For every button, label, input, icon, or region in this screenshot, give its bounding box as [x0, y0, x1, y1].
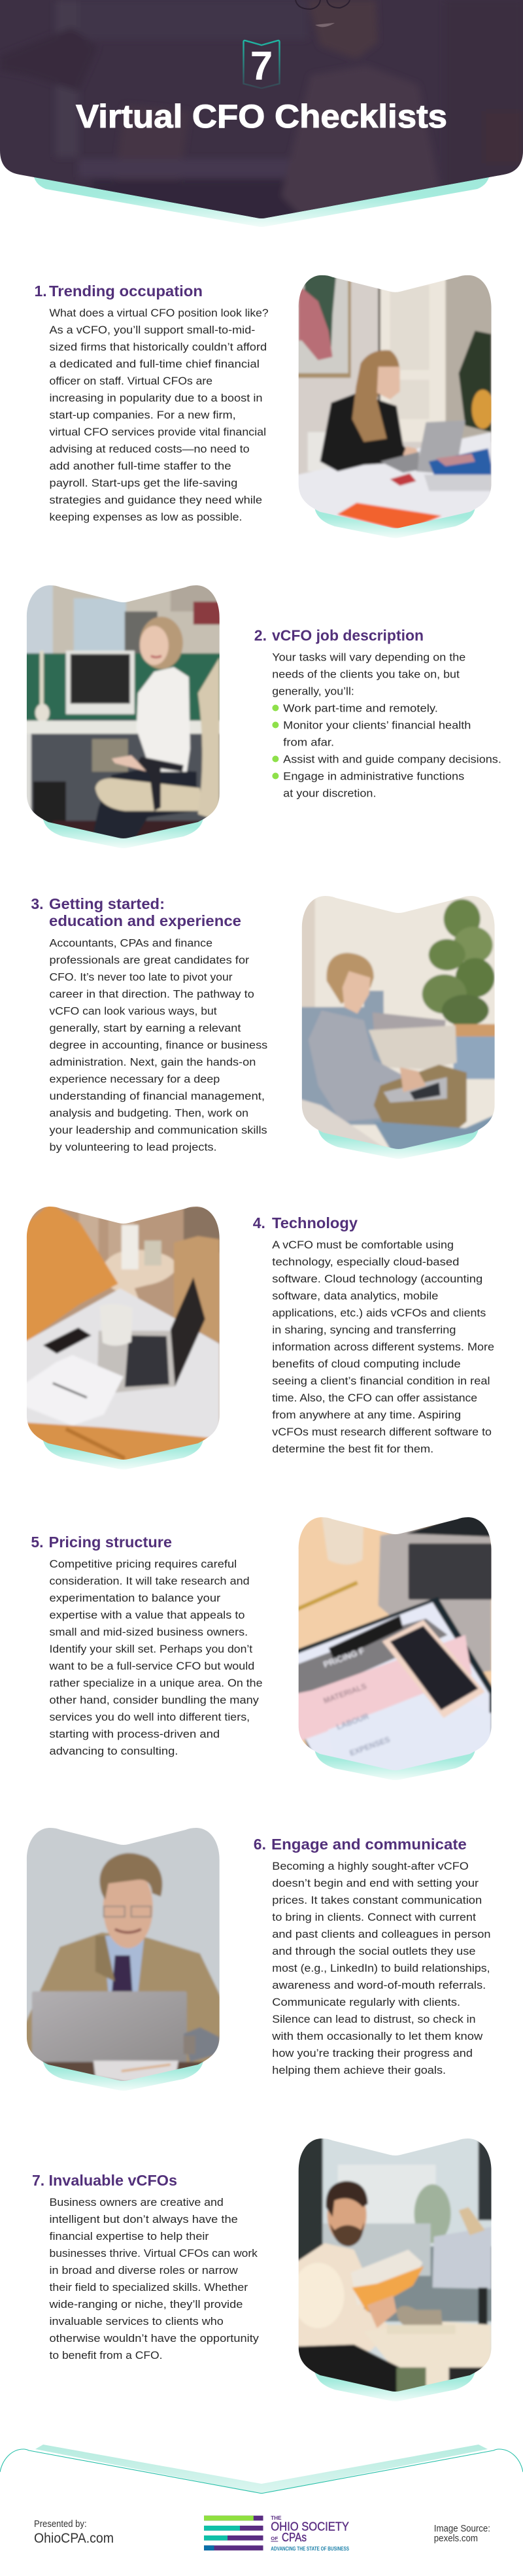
text block: needs of the clients you take on, but: [272, 668, 460, 680]
text block: rather specialize in a unique area. On the: [50, 1677, 263, 1689]
text block: intelligent but don’t always have the: [50, 2213, 238, 2225]
text block: seeing a client’s financial condition in real: [272, 1375, 490, 1387]
footer: image source: pexels.com: [434, 2533, 478, 2544]
text block: expertise with a value that appeals to: [50, 1609, 245, 1621]
text block: experimentation to balance your: [50, 1592, 221, 1604]
text block: software, data analytics, mobile: [272, 1290, 438, 1302]
text block: businesses thrive. Virtual CFOs can work: [50, 2247, 258, 2259]
text block: Becoming a highly sought-after vCFO: [272, 1860, 469, 1872]
text block: Your tasks will vary depending on the: [272, 651, 465, 663]
text block: virtual CFO services provide vital financial: [50, 426, 266, 438]
text block: a dedicated and full-time chief financial: [50, 358, 260, 370]
text block: otherwise wouldn’t have the opportunity: [50, 2332, 259, 2344]
photo: clipboard, phone and laptop: EXPENSES: [348, 1735, 391, 1758]
logo: the Ohio Society of CPAs: CPAs: [282, 2531, 307, 2544]
text block: start-up companies. For a new firm,: [50, 409, 236, 421]
text block: and through the social outlets they use: [272, 1945, 476, 1957]
title: Virtual CFO Checklists: [76, 98, 447, 135]
text block: Business owners are creative and: [50, 2196, 224, 2208]
text block: small and mid-sized business owners.: [50, 1626, 248, 1638]
text block: [50, 936, 267, 1154]
text block: add another full-time staffer to the: [50, 460, 231, 472]
photo: man holding book at desk: [292, 2135, 499, 2401]
footer: presented by: Presented by:: [34, 2518, 87, 2530]
text block: vCFO can look various ways, but: [50, 1005, 217, 1018]
text block: What does a virtual CFO position look like?: [50, 307, 269, 319]
heading: 4.: [253, 1214, 265, 1231]
heading: 6.: [254, 1836, 266, 1853]
text block: Identify your skill set. Perhaps you don’t: [50, 1643, 252, 1655]
text block: advising at reduced costs—no need to: [50, 443, 250, 455]
text block: [271, 1860, 490, 2076]
panel: 4 technology: [24, 1203, 494, 1469]
text block: increasing in popularity due to a boost in: [50, 392, 263, 404]
photo: clipboard, phone and laptop: MATERIALS: [322, 1681, 368, 1706]
text block: professionals are great candidates for: [50, 953, 249, 967]
text block: other hand, consider bundling the many: [50, 1694, 259, 1706]
bullet list: Work part-time and remotely.: [283, 702, 438, 714]
footer chevron: [0, 2445, 523, 2494]
heading: 1.: [34, 283, 47, 300]
footer: image source: [434, 2523, 490, 2544]
bullet list: Monitor your clients’ financial health: [283, 719, 471, 731]
text block: their field to specialized skills. Whether: [50, 2281, 248, 2293]
photo: man on sofa with laptop: [299, 893, 499, 1159]
footer: presented by: OhioCPA.com: [34, 2531, 114, 2546]
text block: financial expertise to help their: [50, 2230, 209, 2242]
text block: [272, 1239, 494, 1455]
text block: information across different systems. More: [272, 1341, 494, 1353]
text block: vCFOs must research different software to: [272, 1426, 492, 1438]
panel: 6 engage and communicate: [24, 1825, 491, 2091]
heading: vCFO job description: [272, 627, 424, 644]
text block: most (e.g., LinkedIn) to build relationships,: [272, 1962, 490, 1974]
heading: 2.: [254, 627, 267, 644]
text block: understanding of financial management,: [50, 1090, 265, 1103]
text block: want to be a full-service CFO but would: [48, 1660, 254, 1672]
text block: administration. Next, gain the hands-on: [50, 1056, 256, 1069]
text block: with them occasionally to let them know: [271, 2030, 483, 2042]
photo: clipboard, phone and laptop: PRICING F: [322, 1645, 365, 1670]
footer: presented by: [34, 2518, 114, 2546]
heading: 3.: [31, 895, 44, 912]
text block: wide-ranging or niche, they’ll provide: [48, 2298, 243, 2310]
text block: A vCFO must be comfortable using: [272, 1239, 454, 1251]
text block: [272, 651, 465, 697]
header mint shadow: [33, 171, 490, 227]
text block: career in that direction. The pathway to: [50, 987, 254, 1001]
bullet list: from afar.: [283, 736, 334, 748]
text block: officer on staff. Virtual CFOs are: [50, 375, 212, 387]
bullet list: [272, 702, 501, 799]
logo: the Ohio Society of CPAs: OF: [271, 2535, 278, 2541]
text block: in broad and diverse roles or narrow: [50, 2264, 239, 2276]
text block: to bring in clients. Connect with current: [272, 1911, 476, 1923]
text block: consideration. It will take research and: [50, 1575, 250, 1587]
text block: starting with process-driven and: [50, 1728, 220, 1740]
text block: time. Also, the CFO can offer assistance: [272, 1392, 477, 1404]
text block: awareness and word-of-mouth referrals.: [272, 1979, 486, 1991]
text block: services you do well into different tiers,: [50, 1711, 250, 1723]
heading: Technology: [272, 1214, 358, 1231]
bullet list: Engage in administrative functions: [283, 770, 464, 782]
heading: Trending occupation: [49, 283, 203, 300]
photo: clipboard, phone and laptop: [295, 1514, 495, 1780]
text block: analysis and budgeting. Then, work on: [50, 1107, 248, 1120]
text block: how you’re tracking their progress and: [272, 2047, 473, 2059]
text block: in sharing, syncing and transferring: [272, 1324, 456, 1336]
text block: generally, start by earning a relevant: [50, 1022, 241, 1035]
text block: degree in accounting, finance or business: [50, 1039, 267, 1052]
text block: keeping expenses as low as possible.: [50, 511, 242, 523]
photo: laptop on bed: [24, 1203, 223, 1469]
text block: strategies and guidance they need while: [50, 494, 262, 506]
logo: the Ohio Society of CPAs: ADVANCING THE STATE OF BUSINESS: [271, 2546, 350, 2552]
logo: the Ohio Society of CPAs: [204, 2515, 350, 2552]
text block: from anywhere at any time. Aspiring: [272, 1409, 461, 1421]
logo: the Ohio Society of CPAs: THE: [271, 2515, 282, 2521]
text block: [48, 2196, 259, 2361]
text block: and past clients and colleagues in person: [272, 1928, 490, 1940]
heading: education and experience: [49, 912, 241, 929]
photo: woman at laptop: [295, 272, 495, 538]
photo: smiling man with laptop: [24, 1825, 223, 2091]
text block: your leadership and communication skills: [50, 1124, 267, 1137]
text block: [48, 1558, 263, 1757]
panel: 3 getting started: [31, 893, 499, 1159]
heading: 7.: [32, 2172, 44, 2189]
text block: prices. It takes constant communication: [272, 1894, 482, 1906]
panel: 7 invaluable vCFOs: [32, 2135, 499, 2401]
bullet list: Assist with and guide company decisions.: [283, 753, 501, 765]
text block: payroll. Start-ups get the life-saving: [50, 477, 237, 489]
text block: helping them achieve their goals.: [272, 2064, 446, 2076]
footer: image source: Image Source:: [434, 2523, 490, 2534]
heading: Invaluable vCFOs: [48, 2172, 177, 2189]
panel: 1 trending occupation: [34, 272, 495, 538]
header background photo: [0, 0, 523, 222]
text block: applications, etc.) aids vCFOs and clients: [272, 1307, 486, 1319]
text block: to benefit from a CFO.: [50, 2349, 162, 2361]
heading: 5.: [31, 1534, 44, 1551]
text block: invaluable services to clients who: [50, 2315, 224, 2327]
heading: [31, 895, 241, 929]
text block: Silence can lead to distrust, so check in: [272, 2013, 476, 2025]
text block: [50, 307, 269, 523]
text block: As a vCFO, you’ll support small-to-mid-: [50, 324, 255, 336]
text block: software. Cloud technology (accounting: [272, 1273, 482, 1285]
heading: Pricing structure: [48, 1534, 172, 1551]
text block: sized firms that historically couldn’t afford: [50, 341, 267, 353]
panel: 5 pricing structure: [31, 1514, 495, 1780]
text block: CFO. It’s never too late to pivot your: [50, 970, 233, 984]
panel: 2 vCFO job description: [24, 582, 501, 848]
text block: benefits of cloud computing include: [272, 1358, 461, 1370]
text block: Communicate regularly with clients.: [272, 1996, 460, 2008]
text block: by volunteering to lead projects.: [50, 1141, 217, 1154]
heading: Engage and communicate: [271, 1836, 467, 1853]
text block: advancing to consulting.: [50, 1745, 178, 1757]
icon: number bookmark badge: 7: [250, 44, 273, 89]
heading: Getting started:: [49, 895, 165, 912]
text block: technology, especially cloud-based: [272, 1256, 459, 1268]
text block: Accountants, CPAs and finance: [50, 936, 212, 950]
panel: header banner: [0, 0, 523, 227]
icon: number bookmark badge: [243, 41, 280, 89]
photo: clipboard, phone and laptop: LABOUR: [335, 1711, 370, 1732]
text block: experience necessary for a deep: [50, 1073, 220, 1086]
text block: generally, you’ll:: [272, 685, 354, 697]
logo: the Ohio Society of CPAs: OHIO SOCIETY: [271, 2520, 349, 2533]
photo: woman at office desk: [24, 582, 223, 848]
text block: determine the best fit for them.: [272, 1443, 433, 1455]
text block: Competitive pricing requires careful: [50, 1558, 237, 1570]
bullet list: at your discretion.: [283, 787, 377, 799]
text block: doesn’t begin and end with setting your: [272, 1877, 479, 1889]
